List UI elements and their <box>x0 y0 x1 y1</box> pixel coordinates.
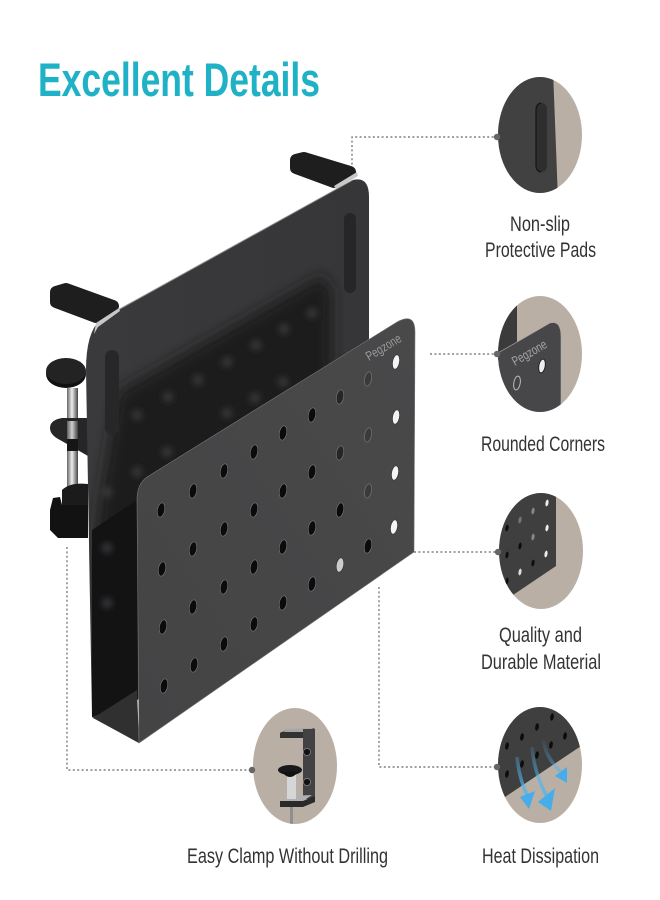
detail: heat dissipation <box>494 707 582 823</box>
callout line: heat dissipation <box>379 587 497 767</box>
callout line: protective pads <box>352 137 497 213</box>
label: easy clamp: Easy Clamp Without Drilling <box>187 845 388 868</box>
callout line: rounded corners <box>430 353 497 355</box>
infographic canvas <box>40 62 604 868</box>
detail: quality material <box>494 493 583 609</box>
callout line: material <box>414 551 498 553</box>
back plate shadow and hole glow <box>92 276 332 717</box>
title: Excellent Details <box>38 53 320 106</box>
left clamp assembly <box>46 358 88 538</box>
back clamp pad <box>296 158 358 189</box>
back plate <box>86 179 369 743</box>
detail: rounded corners <box>494 296 582 412</box>
icon: airflow arrows <box>517 740 567 811</box>
product: desk clamp mount <box>46 158 415 743</box>
left clamp pad <box>56 289 120 334</box>
label: non-slip pads <box>485 213 596 262</box>
brand text: Pegzone <box>363 331 404 364</box>
detail: rounded corners: Pegzone <box>509 337 549 369</box>
perforation holes <box>156 354 401 694</box>
label: quality material: Durable Material <box>481 651 601 674</box>
detail: non-slip pads <box>494 77 582 193</box>
label: quality material: Quality and <box>499 624 582 647</box>
label: non-slip pads: Protective Pads <box>485 239 596 262</box>
label: non-slip pads: Non-slip <box>510 213 570 236</box>
label: rounded corners: Rounded Corners <box>481 433 605 456</box>
callout line: clamp <box>67 547 252 770</box>
label: quality material <box>481 624 601 674</box>
pad slot back left <box>105 350 119 435</box>
detail: easy clamp <box>249 705 340 830</box>
pad slot back right <box>344 213 356 293</box>
label: heat dissipation: Heat Dissipation <box>482 845 599 868</box>
front perforated panel <box>137 319 415 743</box>
plate top highlight <box>100 180 353 320</box>
interior floor <box>93 690 139 743</box>
